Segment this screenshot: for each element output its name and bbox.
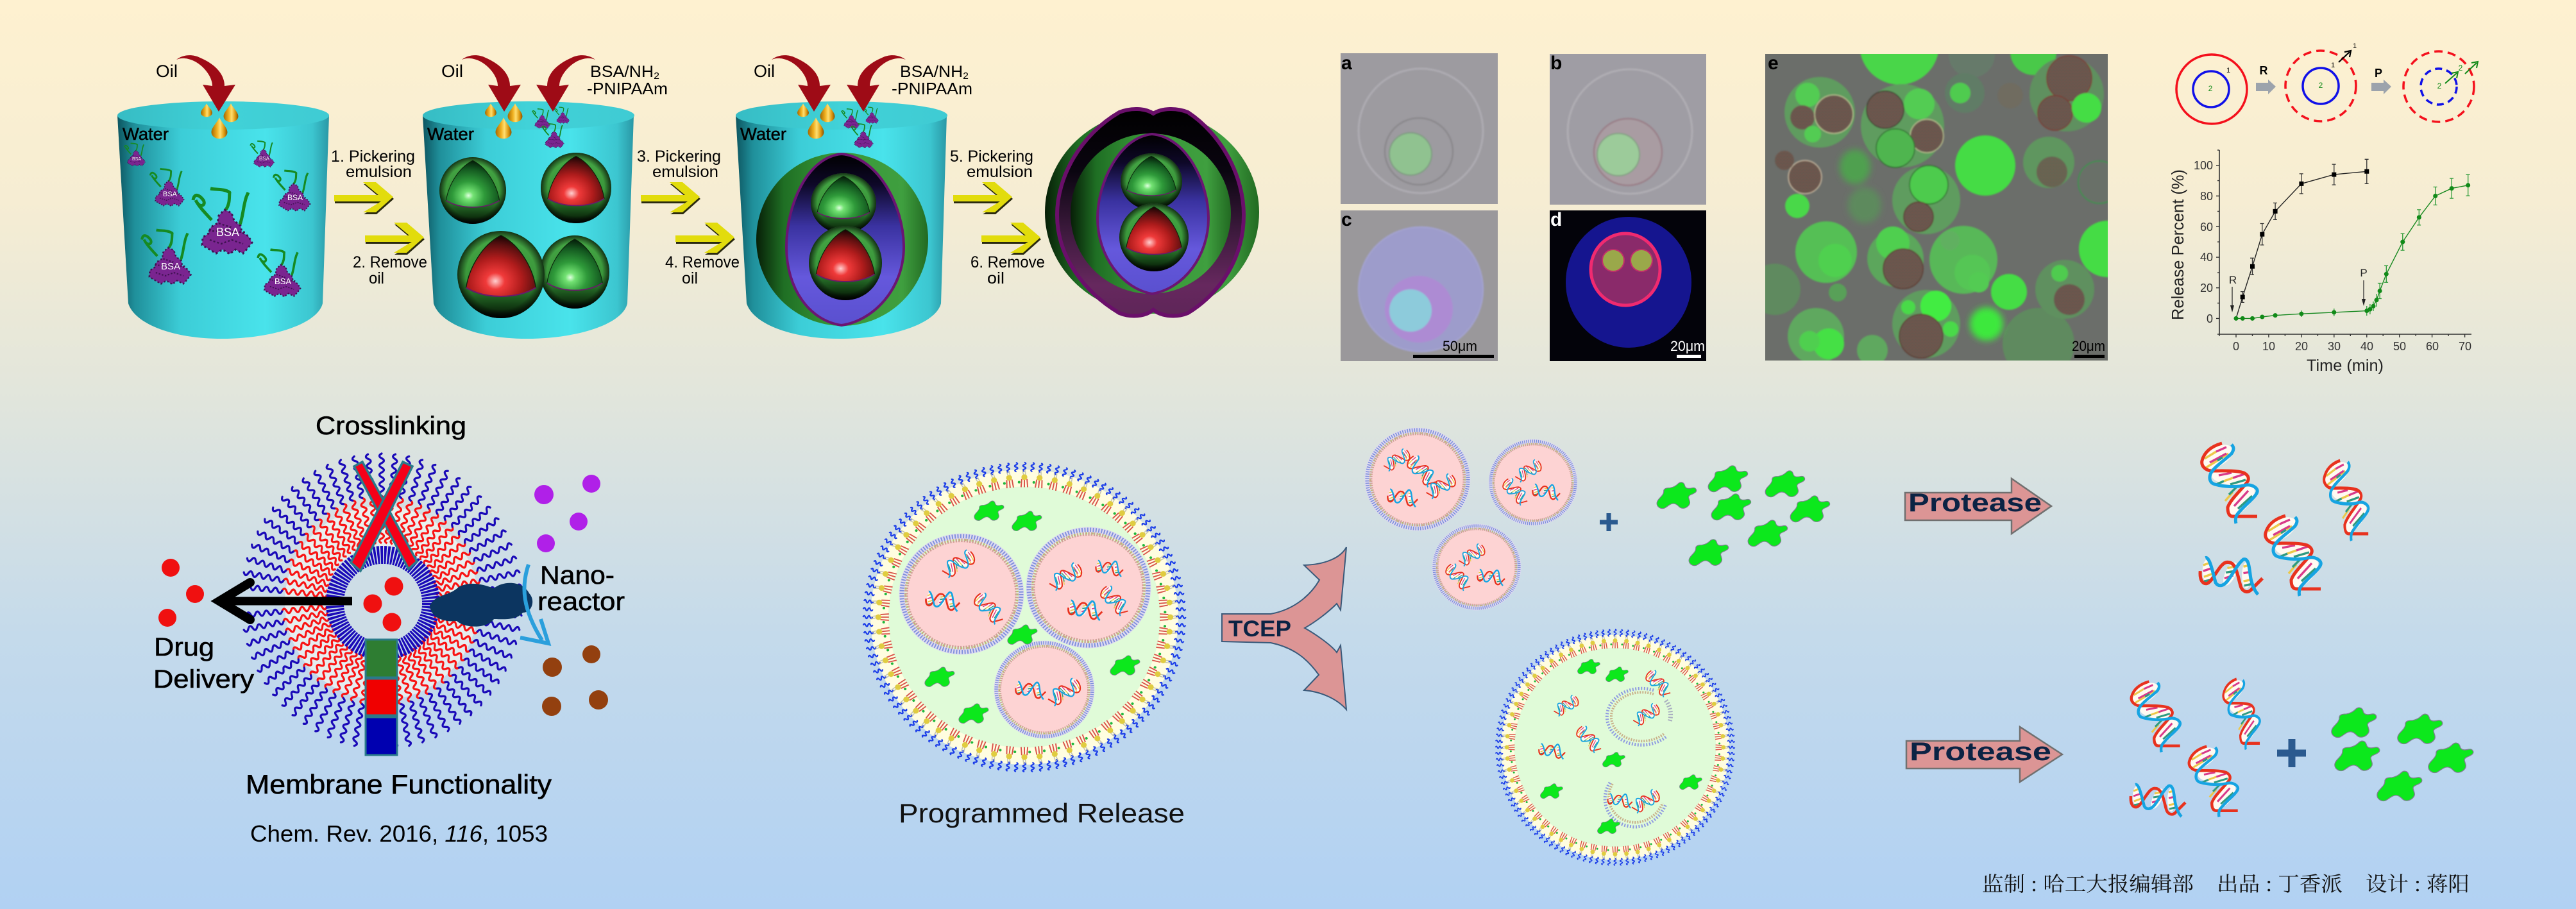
broken vesicle membranes <box>1605 688 1671 827</box>
micrograph c <box>1341 209 1498 361</box>
chart: release percent versus time <box>2168 150 2471 375</box>
y axis tick labels: 0 <box>2207 312 2213 325</box>
micrograph e <box>1765 54 2108 361</box>
x axis title: Time (min) <box>2307 357 2384 375</box>
stage 2 outer shell released: 2 <box>2319 81 2323 90</box>
x axis tick labels: 30 <box>2328 340 2341 353</box>
brown product dots <box>542 645 608 716</box>
citation: Chem. Rev. 2016, 116, 1053 <box>250 820 548 847</box>
micrograph c: 50μm <box>1443 338 1477 354</box>
oil and polymer feed into cylinder 3: BSA/NH <box>900 63 960 81</box>
green proteins in capsule <box>1540 659 1702 834</box>
label Drug Delivery <box>153 633 254 693</box>
micrograph c: c <box>1341 209 1352 230</box>
label Nano-reactor: Nano- <box>540 561 614 590</box>
x axis tick labels: 0 <box>2233 340 2239 353</box>
x axis tick labels <box>2233 340 2471 353</box>
annotation R <box>2229 274 2237 312</box>
y axis tick labels: 20 <box>2200 282 2213 294</box>
stage 2 outer shell released: 1 <box>2353 42 2357 50</box>
arrow: TCEP split <box>1222 547 1346 709</box>
cylinder 1 with BSA proteins: BSA <box>259 156 270 162</box>
step labels 1 and 2: 1. Pickering <box>331 148 415 166</box>
oil and polymer feed into cylinder 2: Oil <box>441 62 463 81</box>
x axis tick labels: 20 <box>2295 340 2308 353</box>
arrow: Protease upper: Protease <box>1908 489 2042 517</box>
micrograph e: 20μm <box>2072 338 2105 354</box>
stage 3 both shells released: 2 <box>2437 81 2442 90</box>
upper DNA products <box>2197 440 2370 596</box>
micelle with radial chains <box>235 448 528 754</box>
step labels 1 and 2 <box>331 148 427 287</box>
step labels 3 and 4: emulsion <box>652 163 718 181</box>
oil and polymer feed into cylinder 2: BSA/NH <box>590 63 650 81</box>
step labels 1 and 2: emulsion <box>346 163 412 181</box>
y axis tick labels: 100 <box>2194 159 2213 172</box>
vesicles with DNA <box>1367 430 1575 608</box>
step labels 5 and 6: oil <box>987 269 1004 287</box>
cylinder 1 with BSA proteins: BSA <box>275 276 291 286</box>
cylinder 1 with BSA proteins: BSA <box>161 261 180 272</box>
cylinder 1 with BSA proteins: Water <box>123 124 169 144</box>
credits: 监制 : 哈工大报编辑部 <box>1982 868 2194 897</box>
cylinder 1 with BSA proteins <box>117 101 329 339</box>
stage 2 outer shell released <box>2285 42 2357 121</box>
released drug molecules <box>158 559 204 627</box>
step labels 1 and 2: 2. Remove <box>353 253 427 271</box>
oil dropping into cylinder 1: Oil <box>156 62 178 81</box>
oil and polymer feed into cylinder 2 <box>441 55 668 148</box>
label Nano-reactor: reactor <box>538 588 625 616</box>
oil and polymer feed into cylinder 3: -PNIPAAm <box>892 79 972 98</box>
outer capsule <box>1491 625 1739 869</box>
panel: lower outcome, capsule with broken vesicles <box>1491 625 1739 869</box>
step labels 5 and 6: 5. Pickering <box>950 148 1033 166</box>
label Drug Delivery: Drug <box>154 633 214 661</box>
lower DNA products <box>2127 676 2261 817</box>
micrograph a: a <box>1341 53 1352 74</box>
cylinder 1 with BSA proteins: BSA <box>287 193 303 202</box>
arrow R: R <box>2259 64 2268 77</box>
step labels 1 and 2: oil <box>369 269 384 287</box>
x axis tick labels: 70 <box>2459 340 2471 353</box>
annotation P: P <box>2360 267 2368 279</box>
micrograph d: d <box>1550 209 1562 230</box>
caption Programmed Release: Programmed Release <box>899 798 1185 828</box>
oil dropping into cylinder 1 <box>156 55 238 139</box>
DNA released in capsule <box>1539 666 1672 820</box>
stage 1 concentric capsule: 2 <box>2208 84 2213 93</box>
label Drug Delivery: Delivery <box>153 665 254 693</box>
final multi-layer capsule <box>1045 109 1259 316</box>
y axis tick labels: 60 <box>2200 221 2213 234</box>
micrograph b: b <box>1550 53 1562 74</box>
enzyme nanoreactor blob <box>430 583 532 627</box>
cylinder 1 with BSA proteins: BSA <box>216 226 239 239</box>
step labels 5 and 6: emulsion <box>967 163 1033 181</box>
y axis tick labels: 40 <box>2200 251 2213 264</box>
label Nano-reactor <box>538 561 625 616</box>
cylinder 3 with nested capsule: Water <box>740 124 786 144</box>
stage 3 both shells released: 2 <box>2459 64 2463 72</box>
oil and polymer feed into cylinder 3 <box>754 55 972 148</box>
cylinder 3 with nested capsule <box>736 101 947 339</box>
step labels 3 and 4 <box>637 148 740 287</box>
oil and polymer feed into cylinder 2: 2 <box>654 71 659 81</box>
credits: 设计 : 蒋阳 <box>2366 868 2470 897</box>
arrow P <box>2371 67 2391 94</box>
black series <box>2236 159 2369 318</box>
arrow: TCEP split: TCEP <box>1228 616 1291 641</box>
step labels 3 and 4: 3. Pickering <box>637 148 721 166</box>
stage 1 concentric capsule <box>2176 55 2247 124</box>
cylinder 2 with four capsules <box>423 101 634 339</box>
crosslink X <box>351 462 417 571</box>
credits <box>1982 868 2470 897</box>
plus sign <box>1600 513 1618 531</box>
outer capsule with vesicles <box>858 457 1191 777</box>
x axis tick labels: 10 <box>2262 340 2275 353</box>
cylinder 2 with four capsules: Water <box>427 124 474 144</box>
purple substrate dots <box>534 475 600 552</box>
micrograph a <box>1341 53 1498 204</box>
panel: polymersome membrane functionality <box>153 412 625 847</box>
arrow P: P <box>2375 67 2382 80</box>
x axis tick labels: 50 <box>2393 340 2406 353</box>
y axis tick labels <box>2194 159 2213 325</box>
panel: Pickering emulsion process <box>117 55 1259 339</box>
arrow: Protease upper <box>1905 479 2051 534</box>
y axis tick labels: 80 <box>2200 190 2213 203</box>
arrow: Protease lower <box>1906 727 2062 782</box>
cylinder 1 with BSA proteins: BSA <box>163 191 178 198</box>
step labels 5 and 6 <box>950 148 1045 287</box>
functional block column <box>366 640 397 755</box>
panel: micrographs a to e <box>1341 53 2108 361</box>
oil and polymer feed into cylinder 2: -PNIPAAm <box>587 79 668 98</box>
annotation R: R <box>2229 274 2237 286</box>
stage 2 outer shell released: 1 <box>2331 62 2335 69</box>
caption Membrane Functionality: Membrane Functionality <box>246 769 552 799</box>
micrograph d <box>1550 209 1706 361</box>
green series <box>2233 174 2470 321</box>
plus sign lower <box>2277 739 2306 767</box>
y axis title: Release Percent (%) <box>2168 169 2187 320</box>
green proteins <box>1657 466 1830 566</box>
panel: programmed release capsule <box>858 457 1191 828</box>
green proteins in capsule <box>925 501 1140 723</box>
heading Crosslinking: Crosslinking <box>316 412 466 440</box>
step labels 5 and 6: 6. Remove <box>970 253 1045 271</box>
credits: 出品 : 丁香派 <box>2217 868 2343 897</box>
arrow: substrate conversion <box>520 565 548 643</box>
drug molecules inside <box>363 577 403 631</box>
oil and polymer feed into cylinder 3: 2 <box>963 71 969 81</box>
annotation P <box>2360 267 2368 306</box>
step labels 3 and 4: oil <box>682 269 698 287</box>
panel: sequential release schematic <box>2176 42 2478 124</box>
micrograph e: e <box>1768 53 1779 74</box>
micrograph b <box>1550 53 1706 205</box>
x axis tick labels: 60 <box>2426 340 2439 353</box>
lower green proteins <box>2332 708 2473 801</box>
DNA inside vesicles <box>926 543 1130 714</box>
stage 3 both shells released <box>2403 51 2478 122</box>
arrow R <box>2256 64 2276 94</box>
oil and polymer feed into cylinder 3: Oil <box>754 62 775 81</box>
panel: upper outcome, free vesicles and proteins <box>1367 430 1830 608</box>
axes <box>2216 150 2471 337</box>
cylinder 1 with BSA proteins: BSA <box>132 157 141 162</box>
arrow: Protease lower: Protease <box>1910 738 2051 766</box>
step labels 3 and 4: 4. Remove <box>665 253 740 271</box>
stage 1 concentric capsule: 1 <box>2226 67 2230 74</box>
x axis tick labels: 40 <box>2360 340 2373 353</box>
micrograph d: 20μm <box>1670 338 1705 354</box>
arrow: drug release <box>219 582 352 620</box>
